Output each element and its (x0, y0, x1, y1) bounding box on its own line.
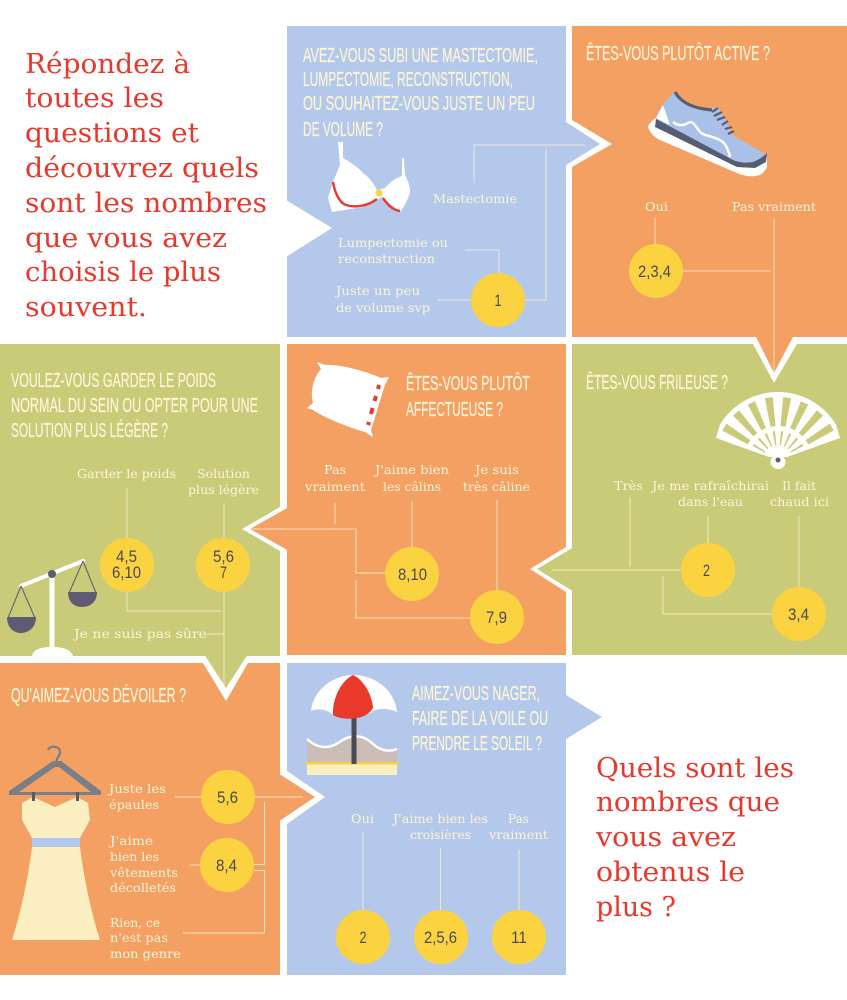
option labels (72, 466, 259, 641)
arrow: to affectueuse panel (530, 547, 574, 592)
heading: poids: NORMAL DU SEIN OU OPTER POUR UNE (11, 395, 258, 417)
option labels: Oui (645, 199, 668, 214)
option labels (304, 462, 530, 494)
option labels: Garder le poids (77, 466, 176, 481)
option labels: Mastectomie (433, 191, 517, 206)
score circle: 1: 1 (494, 291, 502, 310)
heading: affectueuse: ÊTES-VOUS PLUTÔT (406, 372, 530, 395)
option labels (334, 191, 517, 315)
option labels: Pas vraiment (732, 199, 816, 214)
heading: mastectomie (303, 45, 538, 141)
score circle: 2,5,6 (414, 910, 468, 964)
score circle: 11 (492, 910, 546, 964)
icon: bra (328, 142, 410, 212)
option labels: plus légère (188, 482, 259, 497)
score circle: 7,9: 7,9 (486, 608, 507, 627)
closing question: nombres que (596, 787, 780, 818)
heading: frileuse: ÊTES-VOUS FRILEUSE ? (586, 371, 728, 394)
icon: dress on hanger (9, 747, 101, 940)
option labels: de volume svp (336, 300, 430, 315)
score circle: 4,5 6,10: 6,10 (112, 563, 141, 582)
option labels: Pas (508, 811, 529, 826)
heading: affectueuse (406, 372, 530, 421)
panel: qu'aimez-vous dévoiler (0, 663, 325, 975)
option labels: décolletés (110, 880, 176, 895)
score circle: 2,5,6: 2,5,6 (424, 928, 457, 947)
intro text: questions et (25, 118, 199, 149)
option labels: très câline (463, 479, 530, 494)
option labels (351, 811, 548, 842)
option lines (175, 797, 303, 933)
icon: running shoe (648, 91, 767, 176)
score circle: 8,4 (200, 838, 254, 892)
intro text: choisis le plus (25, 257, 221, 288)
option lines (363, 832, 519, 911)
score circle: 3,4: 3,4 (788, 605, 809, 624)
arrow: to dévoiler panel (203, 654, 248, 701)
option labels: épaules (109, 797, 159, 812)
panel: aimez-vous nager (287, 663, 602, 975)
icon: beach umbrella (305, 675, 399, 775)
arrow: to poids panel (242, 503, 289, 555)
panel: active (572, 26, 847, 383)
heading: poids: VOULEZ-VOUS GARDER LE POIDS (11, 370, 216, 392)
option labels (107, 781, 181, 961)
option labels: Pas (324, 462, 346, 477)
score circle: 1 (471, 273, 525, 327)
option labels: n'est pas (110, 930, 168, 945)
option labels: reconstruction (338, 251, 435, 266)
option labels: les câlins (383, 479, 441, 494)
closing question (595, 753, 794, 923)
heading: mastectomie: OU SOUHAITEZ-VOUS JUSTE UN PEU (303, 93, 535, 115)
arrow: from intro text (286, 200, 332, 257)
score circle: 5,6: 5,6 (217, 788, 238, 807)
closing question: vous avez (595, 822, 736, 853)
heading: nager: AIMEZ-VOUS NAGER, (412, 683, 540, 705)
score circle: 8,10: 8,10 (398, 565, 427, 584)
heading: poids: SOLUTION PLUS LÉGÈRE ? (11, 419, 168, 442)
option labels: croisières (410, 827, 471, 842)
icon: weighing scale (7, 561, 97, 656)
heading: mastectomie: LUMPECTOMIE, RECONSTRUCTION, (303, 69, 513, 91)
intro text: sont les nombres (25, 188, 267, 219)
heading: dévoiler: QU'AIMEZ-VOUS DÉVOILER ? (11, 684, 186, 707)
closing question: Quels sont les (596, 753, 794, 784)
score circle: 5,6 (201, 770, 255, 824)
option lines (655, 217, 774, 373)
intro text: Répondez à (25, 49, 190, 80)
score circle: 4,5 6,10 (100, 538, 154, 592)
intro text (25, 49, 267, 323)
option labels (614, 478, 829, 509)
score circle: 3,4 (772, 587, 826, 641)
score circle: 2: 2 (703, 561, 710, 580)
option labels: J'aime bien les (391, 811, 488, 826)
option labels: Oui (351, 811, 374, 826)
option labels: Il fait (782, 478, 816, 493)
option labels: Lumpectomie ou (338, 235, 448, 250)
heading: nager (412, 683, 548, 755)
score circle: 2,3,4 (629, 244, 683, 298)
option labels: Solution (197, 466, 250, 481)
heading: nager: PRENDRE LE SOLEIL ? (412, 733, 542, 755)
heading: nager: FAIRE DE LA VOILE OU (412, 708, 548, 730)
option labels: Très (614, 478, 643, 493)
panel: affectueuse (242, 344, 566, 655)
score circle: 2: 2 (360, 928, 366, 947)
score circle: 7,9 (470, 590, 524, 644)
option labels (645, 199, 816, 214)
score circle: 8,10 (385, 547, 439, 601)
arrow: to final question (560, 695, 602, 739)
intro text: souvent. (25, 292, 147, 323)
option labels: bien les (110, 849, 159, 864)
panel: poids du sein (0, 344, 280, 701)
option labels: Je me rafraîchirai (650, 478, 769, 493)
heading: mastectomie: AVEZ-VOUS SUBI UNE MASTECTOMIE, (303, 45, 538, 67)
closing question: obtenus le (596, 857, 745, 888)
icon: pillow (307, 362, 389, 437)
option lines (437, 145, 585, 300)
icon: fan (716, 392, 840, 469)
option labels: dans l'eau (678, 494, 743, 509)
score circle: 4,5 6,10: 4,5 (116, 547, 137, 566)
option labels: chaud ici (770, 494, 829, 509)
score circle: 2,3,4: 2,3,4 (638, 262, 671, 281)
option lines (552, 497, 799, 614)
option labels: vraiment (488, 827, 548, 842)
score circle: 2 (681, 543, 735, 597)
option labels: Juste un peu (334, 283, 420, 298)
score circle: 5,6 7: 7 (220, 563, 227, 582)
score circle: 5,6 7: 5,6 (213, 547, 234, 566)
option labels: mon genre (110, 946, 181, 961)
heading: poids (11, 370, 258, 442)
arrow: to nager panel (278, 771, 325, 824)
closing question: plus ? (596, 892, 676, 923)
option labels: vraiment (304, 479, 365, 494)
intro text: que vous avez (25, 223, 227, 254)
option labels: Je suis (473, 462, 519, 477)
score circle: 8,4: 8,4 (216, 856, 237, 875)
arrow: to active panel (564, 120, 612, 167)
option labels: J'aime bien (373, 462, 449, 477)
score circle: 2 (336, 910, 390, 964)
option lines (127, 488, 224, 688)
option labels: Je ne suis pas sûre (72, 626, 207, 641)
panel: frileuse (530, 344, 847, 655)
arrow: to frileuse panel (752, 335, 797, 383)
option labels: Rien, ce (110, 915, 160, 930)
option labels: vêtements (109, 865, 178, 880)
score circle: 11: 11 (511, 928, 527, 947)
heading: affectueuse: AFFECTUEUSE ? (406, 399, 503, 421)
option labels: Juste les (107, 781, 166, 796)
option lines (250, 500, 497, 618)
intro text: toutes les (25, 83, 164, 114)
panel: mastectomie (286, 26, 612, 337)
intro text: découvrez quels (25, 153, 259, 184)
score circle: 5,6 7 (196, 538, 250, 592)
heading: mastectomie: DE VOLUME ? (303, 119, 383, 141)
option labels: J'aime (108, 833, 153, 848)
